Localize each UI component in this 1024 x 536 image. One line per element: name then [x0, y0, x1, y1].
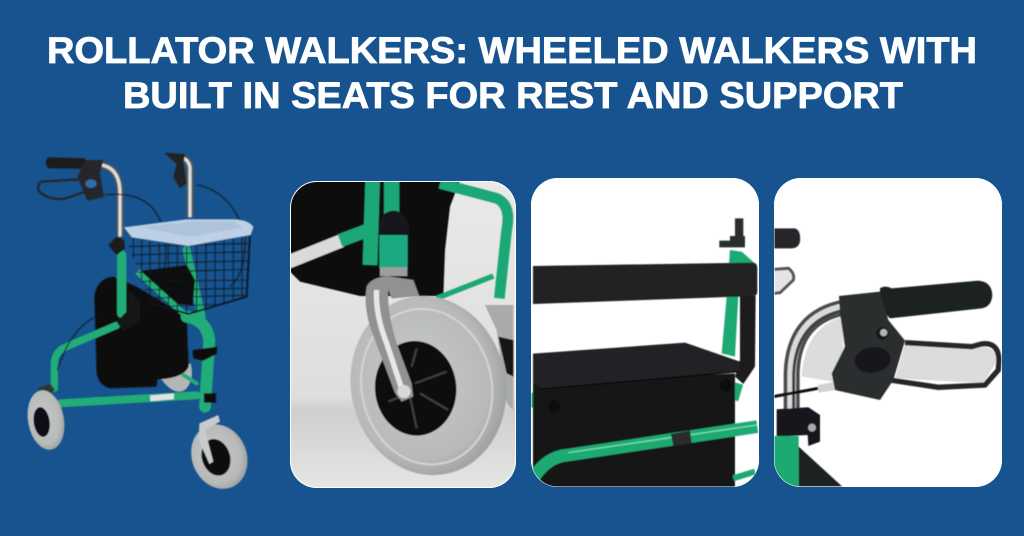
bag rivets — [548, 379, 732, 412]
armrest — [533, 263, 757, 304]
title: BUILT IN SEATS FOR REST AND SUPPORT — [123, 75, 903, 116]
green seat rail — [533, 427, 757, 478]
walker frame — [54, 250, 209, 407]
cable — [773, 388, 818, 397]
silver tube — [287, 241, 342, 263]
wheel hub — [374, 340, 457, 436]
green lower joint — [733, 383, 738, 400]
rail highlight — [568, 425, 757, 453]
bolt — [876, 327, 888, 339]
icon: left grip and brake lever — [38, 157, 104, 201]
icon: back left wheel — [23, 384, 69, 453]
panel: wheel close-up — [287, 180, 523, 490]
green tube — [773, 436, 799, 488]
dial — [853, 345, 892, 375]
black bag behind wheel — [288, 180, 460, 296]
wheel tyre — [350, 295, 506, 476]
green rear tube — [722, 250, 755, 357]
title — [47, 30, 977, 116]
seat piping — [540, 372, 738, 389]
clamp bolt — [808, 424, 816, 432]
chrome fork highlight — [376, 290, 403, 392]
panel: seat close-up — [530, 178, 759, 490]
seat bag — [533, 373, 735, 490]
rubber grip — [880, 281, 992, 318]
rear wheel blurred — [485, 305, 513, 410]
icon: wire basket — [125, 235, 252, 317]
green collar — [379, 235, 408, 268]
panel: brake handle close-up — [773, 178, 1002, 488]
label on frame — [150, 393, 174, 401]
lever outline — [890, 343, 999, 387]
black cap — [379, 211, 410, 233]
background lever ring — [774, 268, 794, 293]
grey window behind handle — [802, 317, 843, 383]
seat cushion — [533, 343, 740, 390]
chrome handle left — [102, 165, 120, 237]
panel edge — [290, 181, 516, 488]
icon: front wheel — [182, 415, 257, 497]
icon: frame clamps — [193, 347, 217, 403]
tyre ridge — [360, 308, 494, 466]
tray inner recess — [140, 222, 243, 237]
title: ROLLATOR WALKERS: WHEELED WALKERS WITH — [47, 30, 977, 71]
icon: tray — [124, 219, 253, 246]
chrome fork — [366, 276, 419, 402]
panel edge — [531, 178, 759, 487]
icon: rear right wheel — [160, 363, 192, 392]
icon: fold knob — [108, 237, 125, 255]
top post — [719, 218, 745, 247]
brake housing — [832, 292, 905, 400]
cable connector — [818, 382, 837, 393]
clamp — [777, 407, 820, 446]
black seat corner — [799, 447, 842, 487]
green frame tubes — [340, 180, 508, 298]
wheel spokes — [388, 348, 448, 428]
lower right tube — [733, 472, 755, 478]
illustration: rollator walker — [23, 153, 257, 497]
brake cables — [57, 185, 245, 370]
chrome handle right — [182, 157, 190, 217]
background grip — [773, 228, 800, 248]
small green stub — [532, 392, 534, 408]
chrome tube — [792, 307, 845, 412]
axle bolt — [397, 385, 411, 398]
neck — [380, 267, 407, 276]
lever interior — [895, 343, 997, 383]
bolt head — [880, 329, 887, 336]
panel edge — [774, 178, 1002, 487]
armrest support — [735, 296, 756, 384]
icon: seat bracket — [117, 290, 140, 332]
icon: storage bag — [94, 277, 189, 388]
icon: right grip and brake lever — [164, 153, 187, 188]
rail clip — [671, 431, 692, 446]
